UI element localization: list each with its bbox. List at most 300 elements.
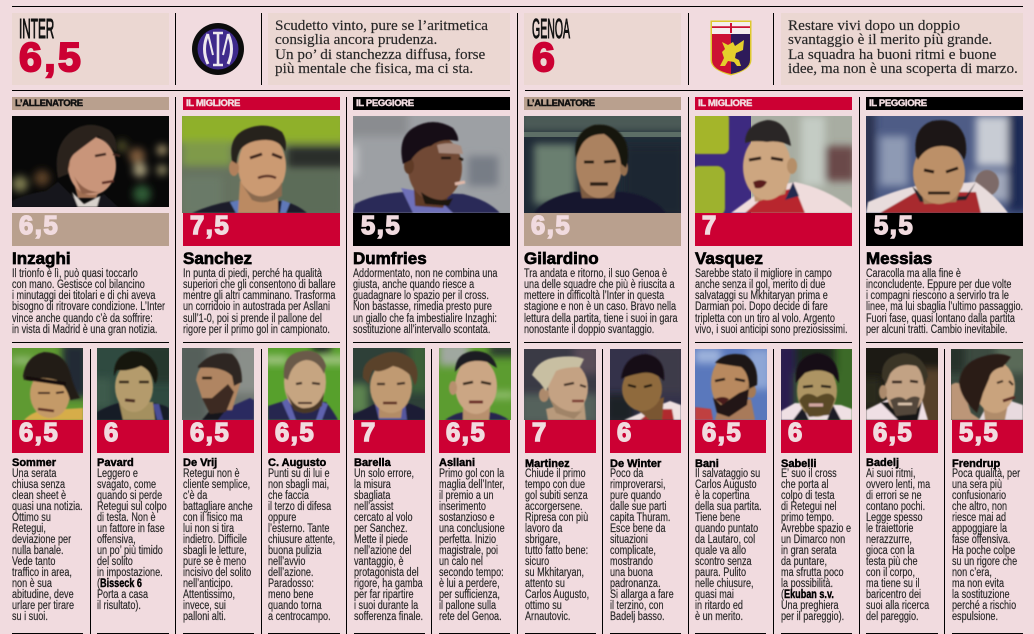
review: Badelj: Legge spesso [866, 512, 923, 524]
review: Martinez: tempo con due [525, 479, 585, 491]
review: De Winter: dalle sue parti [610, 501, 667, 513]
review: Dumfries: Addormentato, non ne combina una [353, 268, 497, 280]
review: Frendrup: Poca qualità, per [952, 468, 1020, 480]
review: Martinez: ottimo su [525, 600, 562, 612]
review: Martinez: accorgersene. [525, 501, 583, 513]
review: Sanchez: mentre gli altri camminano. Trasforma [183, 290, 335, 302]
review: Badelj: del pareggio. [866, 611, 919, 623]
review: Vasquez [695, 268, 847, 336]
rating band: 7: 7 [532, 419, 548, 447]
top rule [12, 6, 1023, 7]
review: Sanchez: superiori che gli consentono di ballare [183, 279, 336, 291]
card: Inzaghi, coach [12, 97, 169, 343]
rating band: 6 [610, 420, 681, 453]
review: Frendrup [952, 469, 1020, 623]
rating band: 6,5: 6,5 [19, 212, 59, 240]
review: Badelj: baricentro dei [866, 589, 921, 601]
review: De Vrij: sbagli le letture, [183, 545, 247, 557]
card: Vasquez, best [694, 97, 852, 343]
review: Inzaghi: Il trionfo è lì, può quasi toccarlo [12, 268, 138, 280]
review: C. Augusto: meno bene [268, 589, 313, 601]
team score box: Genoa [524, 13, 681, 85]
review: Bani: scontro senza [695, 556, 752, 568]
review: Gilardino: mettere in difficoltà l’Inter in questa [524, 290, 664, 302]
review: Sommer: chiusa senza [12, 479, 65, 491]
review: Badelj: contano pochi. [866, 501, 925, 513]
review: C. Augusto: buona pulizia [268, 545, 322, 557]
review: Messias: i compagni riescono a servirlo tra le [866, 290, 1009, 302]
review: Sabelli: la possibilità. [781, 578, 833, 590]
review: Sommer: non è sua [12, 578, 52, 590]
review: Pavard: in impostazione. [97, 567, 163, 579]
review: Bani: della sua partita. [695, 501, 762, 513]
review: Inzaghi: in vista di Madrid è una gran notizia. [12, 324, 157, 336]
review: Barella: vantaggio, è [354, 556, 404, 568]
review: Bani: nelle chiusure, [695, 578, 754, 590]
rating band: 6,5: 6,5 [19, 419, 59, 447]
label: il peggiore: IL PEGGIORE [356, 98, 414, 109]
review: De Vrij: indietro. Difficile [183, 534, 247, 546]
review: Bani: da Lautaro, col [695, 534, 755, 546]
rating band: 5,5 [952, 420, 1023, 453]
team name: Genoa: GENOA [532, 13, 570, 44]
review: Messias: Fuori fase, quasi lontano dalla partita [866, 313, 1015, 325]
photo: Sommer [12, 348, 83, 420]
photo: De Winter [610, 349, 681, 420]
review: Asllani: il premio a un [439, 490, 494, 502]
review: Sommer: Retegui, [12, 523, 46, 535]
review: Sabelli: che porta al [781, 479, 828, 491]
review: Pavard: Porta a casa [97, 589, 148, 601]
rating band: 7 [354, 420, 425, 453]
review: Bani: Tiene bene [695, 512, 740, 524]
review: Martinez: su Mkhitaryan, [525, 567, 584, 579]
card: Badelj [866, 348, 938, 634]
review: C. Augusto: oppure [268, 512, 296, 524]
review: Sommer: quasi una notizia. [12, 501, 83, 513]
review: De Vrij: c’è da [183, 490, 207, 502]
review: Barella: sbagliata [354, 490, 390, 502]
summary text: Inter: più mentale che fisica, ma ci sta. [275, 60, 473, 77]
icon: Inter crest [192, 23, 244, 75]
review: Martinez [525, 469, 589, 623]
review: De Winter: situazioni [610, 534, 648, 546]
rating band: 6,5 [695, 420, 766, 453]
review: Martinez: sicuro [525, 556, 549, 568]
review: C. Augusto: dell’azione. [268, 567, 313, 579]
name: Asllani: Asllani [439, 457, 475, 469]
review: Bani: quasi mai [695, 589, 734, 601]
review: Asllani: è lui a perdere, [439, 578, 500, 590]
review: De Winter: capita Thuram. [610, 512, 670, 524]
card: Dumfries, worst [353, 97, 510, 343]
review: C. Augusto: il terzo di difesa [268, 501, 331, 513]
rating band: 5,5 [353, 213, 510, 246]
review: Vasquez: anche senza il gol, merito di due [695, 279, 825, 291]
review: Barella: sofferenza finale. [354, 611, 423, 623]
name: Sommer: Sommer [12, 457, 56, 469]
rating band: 6,5: 6,5 [446, 419, 486, 447]
review: Barella: nell’assist [354, 501, 393, 513]
review: Gilardino: Tra andata e ritorno, il suo Genoa è [524, 268, 667, 280]
review: Vasquez: Darmian poi. Dopo decide di fare [695, 301, 828, 313]
review: De Vrij: pure se è meno [183, 556, 246, 568]
name: Sanchez: Sanchez [183, 249, 252, 268]
review: Sabelli: ma sfrutta poco [781, 567, 844, 579]
review: Frendrup: confusionario [952, 490, 1006, 502]
summary text: Inter: Un po’ di stanchezza diffusa, forse [275, 46, 485, 63]
name: C. Augusto: C. Augusto [268, 457, 326, 469]
review: Badelj: nerazzurre, [866, 534, 912, 546]
review: Martinez: Arnautovic. [525, 611, 570, 623]
name: Martinez: Martinez [525, 458, 570, 470]
name: Bani: Bani [695, 458, 719, 470]
review: Sanchez [183, 268, 336, 336]
rating band: 5,5: 5,5 [361, 212, 401, 240]
label: il migliore [183, 97, 340, 110]
summary text: Genoa: svantaggio è il merito più grande. [788, 31, 992, 48]
summary text: Inter: consiglia ancora prudenza. [275, 31, 437, 48]
rating band: 5,5: 5,5 [959, 419, 999, 447]
review: Badelj: di errori se ne [866, 490, 922, 502]
rating band: 6,5: 6,5 [275, 419, 315, 447]
review: Asllani: una conclusione [439, 523, 505, 535]
review: Sabelli: da puntare, [781, 556, 827, 568]
review: Bani: in ritardo ed [695, 600, 743, 612]
photo: De Vrij [182, 348, 254, 420]
review: Dumfries: guadagnare lo spazio per il cross. [353, 290, 489, 302]
review: Dumfries: giusta, anche quando riesce a [353, 279, 474, 291]
review: De Winter: il terzino, con [610, 600, 664, 612]
label: il peggiore [353, 97, 510, 110]
review: Barella [354, 468, 423, 623]
photo: Frendrup [951, 349, 1023, 420]
rating band: 6: 6 [617, 419, 633, 447]
card: Martinez [525, 348, 596, 634]
review: Inzaghi [12, 268, 165, 336]
name: Gilardino: Gilardino [524, 249, 599, 268]
icon: Genoa crest [710, 20, 752, 76]
summary text: Inter: Scudetto vinto, pure se l’aritmetica [275, 17, 488, 34]
review: Inzaghi: vince anche quando c’è da soffrire: [12, 313, 153, 325]
name: Pavard: Pavard [97, 457, 134, 469]
review: Barella: per Sanchez. [354, 523, 408, 535]
review: Sabelli: colpo di testa [781, 490, 835, 502]
review: De Winter: Si allarga a fare [610, 589, 674, 601]
review: Barella: i suoi durante la [354, 600, 418, 612]
team rating: 6,5: 6,5 [19, 34, 83, 80]
rating band: 6,5 [268, 420, 340, 453]
review: Bani: quale va allo [695, 545, 746, 557]
review: Barella: nell’azione del [354, 545, 412, 557]
review: Martinez: gol subiti senza [525, 490, 588, 502]
review: Asllani: secondo tempo: [439, 567, 504, 579]
label: il migliore: IL MIGLIORE [698, 98, 752, 109]
review: De Winter: una buona [610, 567, 653, 579]
review: De Winter: Esce bene da [610, 523, 666, 535]
rating band: 6,5: 6,5 [702, 419, 742, 447]
label: il peggiore: IL PEGGIORE [869, 98, 927, 109]
review: Inzaghi: bisogno di ritrovare condizione. L’Inter [12, 301, 165, 313]
rating band: 7 [695, 213, 852, 246]
review: Dumfries [353, 268, 498, 336]
review: Pavard: svagato, come [97, 479, 156, 491]
review: Asllani: rete del Genoa. [439, 611, 502, 623]
review: Sabelli: (Ekuban s.v. [781, 589, 834, 601]
review: Barella: Mette il piede [354, 534, 408, 546]
review: De Vrij: cliente semplice, [183, 479, 250, 491]
review: Messias: linee, ma lui sbaglia l’ultimo passaggio. [866, 301, 1023, 313]
label: l'allenatore [12, 97, 169, 110]
review: Asllani: il pallone sulla [439, 600, 496, 612]
review: Sanchez: In punta di piedi, perché ha qualità [183, 268, 322, 280]
review: C. Augusto: chiusure attente, [268, 534, 335, 546]
name: Inzaghi: Inzaghi [12, 249, 71, 268]
photo: Messias [866, 116, 1023, 213]
label: l'allenatore: L’ALLENATORE [527, 98, 595, 109]
review: Sabelli: Avrebbe spazio e [781, 523, 851, 535]
photo: Dumfries [353, 116, 510, 213]
review: Vasquez: Sarebbe stato il migliore in campo [695, 268, 832, 280]
rating band: 6: 6 [788, 419, 804, 447]
rating band: 6 [781, 420, 852, 453]
review: Frendrup: che altro, non [952, 501, 1007, 513]
review: Asllani: magistrale, poi [439, 545, 498, 557]
review: Frendrup: una sera più [952, 479, 1002, 491]
name: Barella: Barella [354, 457, 391, 469]
review: Bani: quando puntato [695, 523, 758, 535]
card: Gilardino, coach [524, 97, 681, 343]
review: Sommer: Vede tanto [12, 556, 55, 568]
team summary: Genoa [781, 13, 1023, 85]
review: De Vrij: palloni alti. [183, 611, 226, 623]
review: Sommer [12, 468, 83, 623]
card: Sommer [12, 348, 83, 634]
review: Badelj: gioca con la [866, 545, 914, 557]
review: Sabelli: primo tempo. [781, 512, 834, 524]
review: Gilardino [524, 268, 678, 336]
review: C. Augusto: quando torna [268, 600, 322, 612]
rating band: 7,5 [183, 213, 340, 246]
review: Pavard: quando si perde [97, 490, 162, 502]
review: De Winter [610, 469, 674, 623]
card: C. Augusto [268, 348, 340, 634]
review: Sanchez: sull’1-0, poi si prende il pallone del [183, 313, 322, 325]
review: Messias [866, 269, 1023, 336]
card: Sabelli [781, 348, 852, 634]
rating band: 6,5: 6,5 [531, 212, 571, 240]
review: Asllani: per sufficienza, [439, 589, 500, 601]
panel: Inter [12, 13, 511, 634]
label: l'allenatore [524, 97, 681, 110]
review: Frendrup: riesce mai ad [952, 512, 1006, 524]
review: De Vrij: lui non si tira [183, 523, 234, 535]
review: Martinez: tutto fatto bene: [525, 545, 588, 557]
name: Dumfries: Dumfries [353, 249, 427, 268]
rating band: 7: 7 [361, 419, 377, 447]
review: De Winter: Badelj basso. [610, 611, 665, 623]
name: Vasquez: Vasquez [695, 249, 763, 268]
review: C. Augusto: Punti su di lui e [268, 468, 330, 480]
review: Badelj: con il corpo, [866, 567, 915, 579]
review: Pavard: un po’ più timido [97, 545, 163, 557]
review: Pavard: Leggero e [97, 468, 138, 480]
summary text: Genoa [788, 17, 1018, 77]
review: Frendrup: la sostituzione [952, 589, 1010, 601]
card: De Winter [610, 348, 681, 634]
review: Frendrup: su un rigore che [952, 556, 1017, 568]
rating band: 7,5: 7,5 [190, 212, 230, 240]
card: Barella [353, 348, 425, 634]
review: De Vrij: battagliare anche [183, 501, 253, 513]
review: Badelj: ma tiene su il [866, 578, 920, 590]
photo: Vasquez [695, 116, 852, 213]
review: Martinez: Ripresa con più [525, 512, 588, 524]
review: Asllani [439, 468, 505, 623]
review: Sommer: urlare per tirare [12, 600, 74, 612]
review: Frendrup: non c’era, [952, 567, 992, 579]
review: C. Augusto [268, 468, 335, 623]
name: De Winter: De Winter [610, 458, 661, 470]
team summary: Inter [268, 13, 510, 85]
rating band: 7 [525, 420, 596, 453]
review: Pavard: offensiva, [97, 534, 136, 546]
review: Asllani: sostanzioso e [439, 512, 495, 524]
review: Sanchez: rigore per il primo gol in campionato. [183, 324, 330, 336]
review: Sabelli: per il pareggio). [781, 611, 844, 623]
review: C. Augusto: non sbagli mai, [268, 479, 329, 491]
name: Sabelli: Sabelli [781, 458, 816, 470]
review: Bani [695, 469, 762, 623]
card: De Vrij [182, 348, 254, 634]
panel: Genoa [524, 13, 1023, 634]
review: Sabelli: E’ suo il cross [781, 468, 837, 480]
review: Frendrup: perché a rischio [952, 600, 1016, 612]
card: Sanchez, best [182, 97, 340, 343]
photo: Sanchez [182, 116, 340, 213]
review: Barella: rigore, ha gamba [354, 578, 423, 590]
review: Pavard: il risultato). [97, 600, 141, 612]
summary text: Genoa: La squadra ha buoni ritmi e buone [788, 46, 996, 63]
summary text: Genoa: Restare vivi dopo un doppio [788, 17, 960, 34]
review: Sommer: nulla banale. [12, 545, 64, 557]
review: Frendrup: appoggiare la [952, 523, 1007, 535]
team name: Inter: INTER [19, 13, 54, 44]
review: Gilardino: nonostante il doppio svantaggio. [524, 324, 654, 336]
review: Sabelli [781, 469, 851, 623]
review: Gilardino: stagione e non è un caso. Bravo nella [524, 301, 676, 313]
review: Badelj: ovvero lenti, ma [866, 479, 930, 491]
divider between teams [517, 13, 518, 634]
rating band: 6,5 [439, 420, 510, 453]
card: Bani [695, 348, 766, 634]
review: Badelj: testa più che [866, 556, 918, 568]
review: Sommer: deviazione per [12, 534, 71, 546]
rating band: 6,5 [524, 213, 681, 246]
review: Messias: Caracolla ma alla fine è [866, 268, 961, 280]
card: Pavard [97, 348, 169, 634]
summary text: Genoa: idee, ma non è una scoperta di marzo. [788, 60, 1018, 77]
review: Dumfries: Non bastasse, rimedia presto pure [353, 301, 492, 313]
photo: Inzaghi [12, 116, 169, 207]
name: Messias: Messias [866, 249, 932, 268]
review: Badelj: Ai suoi ritmi, [866, 468, 915, 480]
review: Pavard: Retegui sul colpo [97, 501, 167, 513]
team rating: 6: 6 [532, 34, 557, 80]
review: Vasquez: tripletta con un tiro al volo. Argento [695, 313, 835, 325]
photo: Barella [353, 348, 425, 420]
review: Messias: per alcuni tratti. Cambio inevitabile. [866, 324, 1007, 336]
review: Bani: è un merito. [695, 611, 743, 623]
review: Inzaghi: i minutaggi dei titolari e di chi aveva [12, 290, 155, 302]
photo: Gilardino [524, 116, 681, 213]
review: Frendrup: espulsione. [952, 611, 998, 623]
review: Sommer: clean sheet è [12, 490, 66, 502]
rating band: 6 [97, 420, 169, 453]
rating band: 5,5: 5,5 [874, 212, 914, 240]
review: Martinez: Carlos Augusto, [525, 589, 589, 601]
review: Martinez: attento su [525, 578, 565, 590]
review: Badelj [866, 468, 930, 623]
review: Sommer: su i suoi. [12, 611, 48, 623]
review: Pavard: un fattore in fase [97, 523, 165, 535]
review: Asllani: inserimento [439, 501, 486, 513]
review: Badelj: suoi alla ricerca [866, 600, 929, 612]
review: De Vrij [183, 468, 253, 623]
review: Sabelli: un Dimarco non [781, 534, 845, 546]
review: Bani: è la copertina [695, 490, 750, 502]
review: Asllani: Primo gol con la [439, 468, 504, 480]
rating band: 6,5 [866, 420, 938, 453]
label: il migliore [695, 97, 852, 110]
review: Pavard: (Bisseck 6 [97, 578, 142, 590]
name: Badelj: Badelj [866, 457, 899, 469]
review: Bani: Il salvataggio su [695, 468, 760, 480]
review: Inzaghi: con mano. Gestisce col bilancino [12, 279, 145, 291]
review: Pavard: del solito [97, 556, 133, 568]
review: Dumfries: un giallo che fa imbestialire Inzaghi: [353, 313, 497, 325]
review: Sommer: abitudine, deve [12, 589, 74, 601]
photo: Martinez [524, 349, 596, 420]
rating band: 7: 7 [702, 212, 718, 240]
review: Gilardino: lettura della partita, tiene i suoi in gara [524, 313, 678, 325]
review: De Winter: Poco da [610, 468, 643, 480]
review: De Vrij: Attentissimo, [183, 589, 235, 601]
review: De Winter: complicate, [610, 545, 656, 557]
review: Barella: protagonista del [354, 567, 419, 579]
review: Messias: inconcludente. Eppure per due volte [866, 279, 1011, 291]
review: Frendrup: Ha poche colpe [952, 545, 1015, 557]
label: l'allenatore: L’ALLENATORE [15, 98, 83, 109]
review: Sommer: traffico in area, [12, 567, 72, 579]
review: Barella: la misura [354, 479, 391, 491]
review: Bani: Carlos Augusto [695, 479, 757, 491]
photo: Badelj [866, 348, 938, 420]
rating band: 6: 6 [104, 419, 120, 447]
review: C. Augusto: nell’avvio [268, 556, 305, 568]
photo: C. Augusto [268, 348, 340, 420]
name: De Vrij: De Vrij [183, 457, 217, 469]
card: Frendrup [952, 348, 1023, 634]
review: De Vrij: invece, sui [183, 600, 226, 612]
review: Barella: cercato al volo [354, 512, 413, 524]
review: Asllani: un calo nel [439, 556, 483, 568]
label: il peggiore [866, 97, 1023, 110]
review: C. Augusto: a centrocampo. [268, 611, 331, 623]
review: Sommer: Una serata [12, 468, 56, 480]
review: De Vrij: incisivo del solito [183, 567, 251, 579]
review: Pavard [97, 468, 167, 612]
